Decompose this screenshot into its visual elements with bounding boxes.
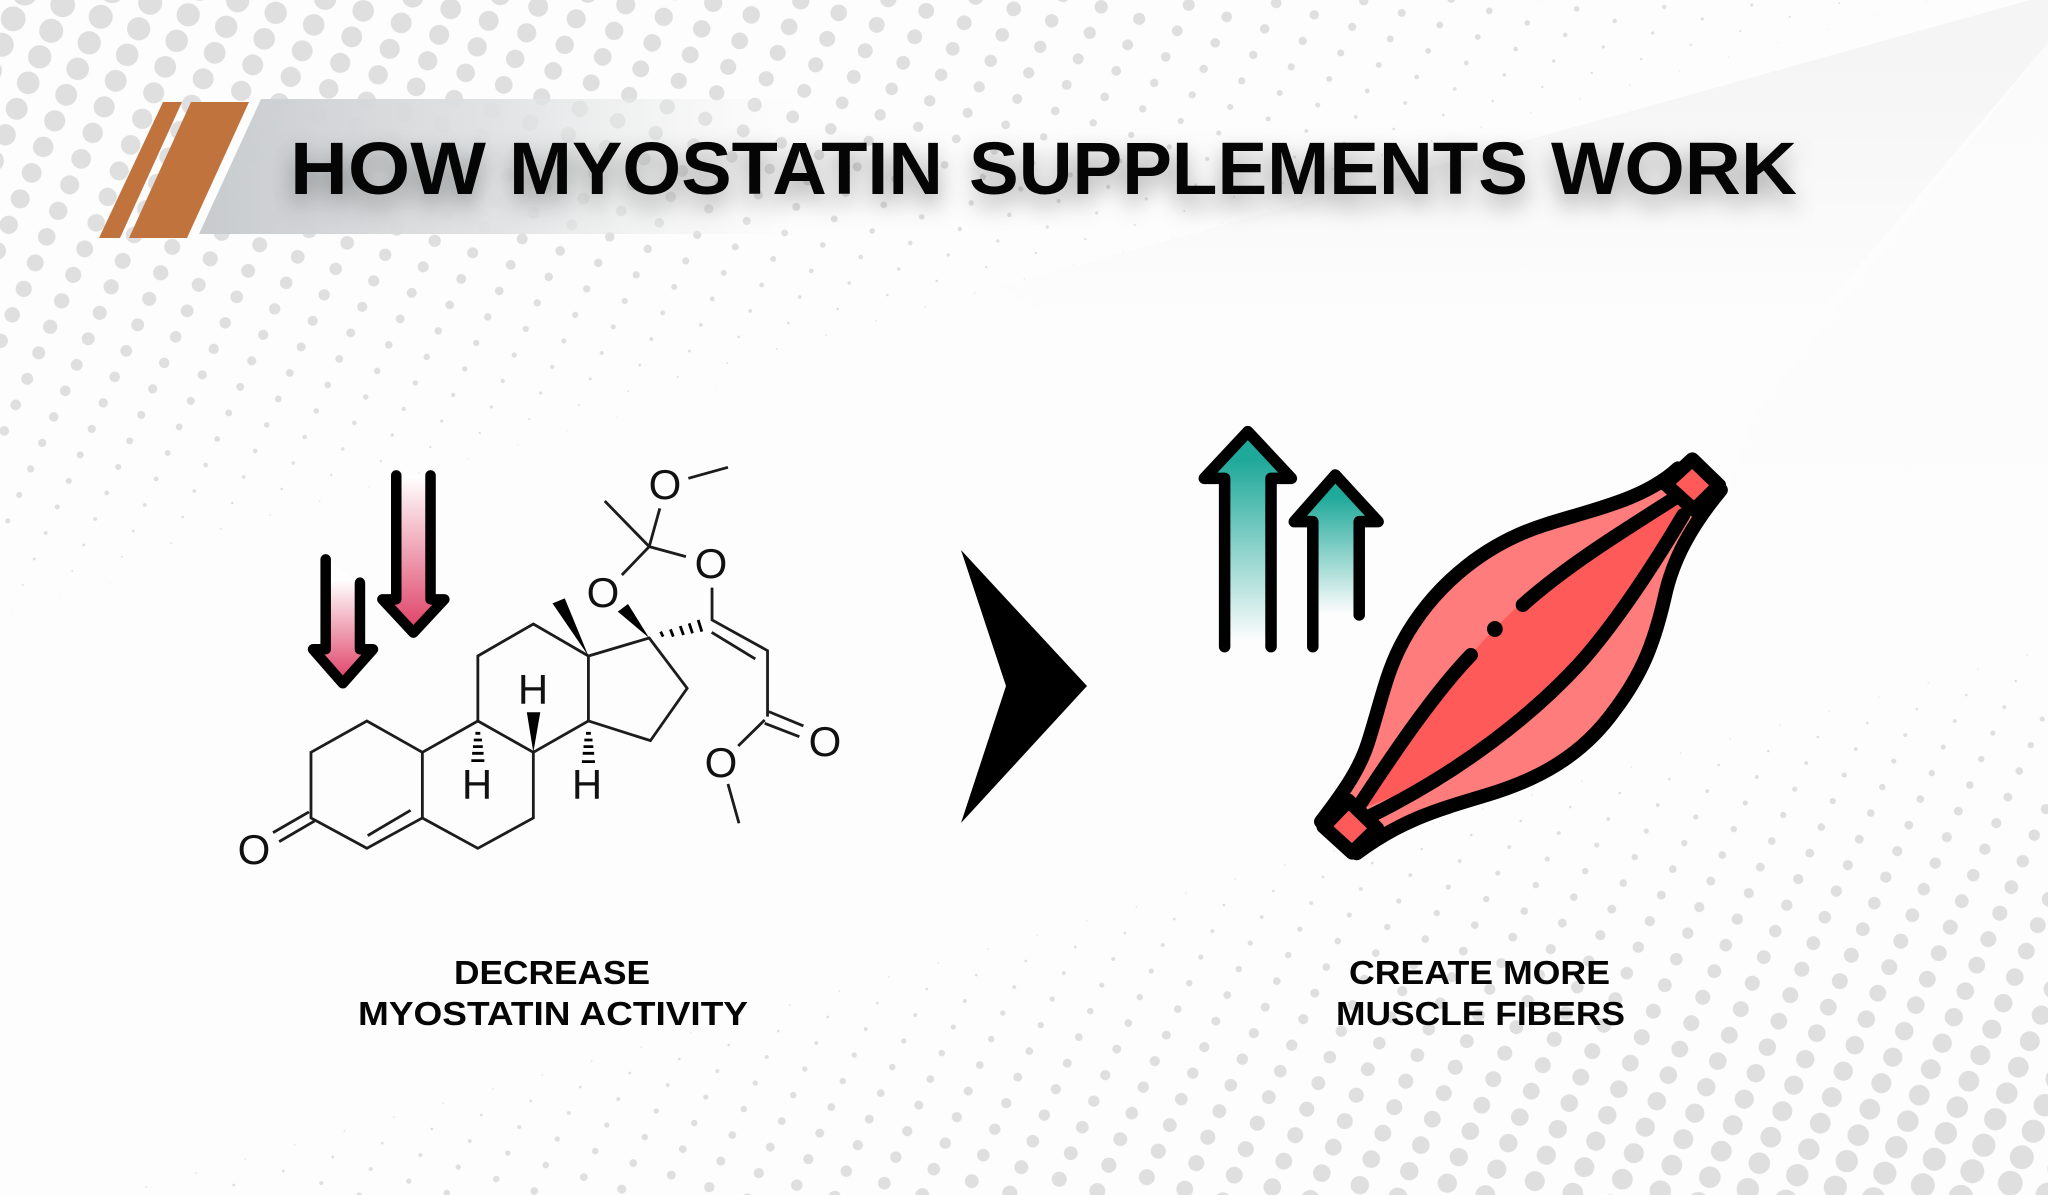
molecule diagram: steroid structure: H	[518, 666, 548, 713]
title: MYOSTATIN	[509, 127, 943, 210]
label: create more muscle fibers	[1336, 954, 1625, 1032]
icon: small up arrow	[1294, 475, 1378, 647]
label: decrease myostatin activity: MYOSTATIN ACTIVITY	[358, 995, 748, 1032]
icon: large down arrow	[382, 475, 444, 633]
label: decrease myostatin activity: DECREASE	[454, 954, 650, 991]
header banner	[99, 99, 1797, 238]
molecule diagram: steroid structure	[238, 461, 841, 873]
icon: muscle	[1321, 459, 1721, 853]
title: SUPPLEMENTS	[969, 127, 1528, 210]
molecule diagram: steroid structure: O	[587, 569, 619, 616]
molecule diagram: steroid structure: O	[705, 739, 737, 786]
icon: increase arrows	[1204, 432, 1378, 647]
banner grey band	[199, 99, 800, 234]
molecule diagram: steroid structure: H	[462, 761, 492, 808]
label: create more muscle fibers: MUSCLE FIBERS	[1336, 995, 1625, 1032]
molecule diagram: steroid structure: O	[238, 826, 270, 873]
icon: large up arrow	[1204, 432, 1291, 647]
title: WORK	[1551, 127, 1797, 210]
molecule diagram: steroid structure: H	[572, 761, 602, 808]
arrow: chevron	[961, 550, 1087, 823]
molecule diagram: steroid structure: O	[695, 540, 727, 587]
molecule diagram: steroid structure: O	[809, 718, 841, 765]
molecule diagram: steroid structure: O	[649, 461, 681, 508]
title	[290, 127, 1797, 210]
label: create more muscle fibers: CREATE MORE	[1349, 954, 1610, 991]
icon: decrease arrows	[313, 475, 444, 683]
label: decrease myostatin activity	[358, 954, 748, 1032]
icon: small down arrow	[313, 559, 373, 683]
orange bar narrow	[99, 102, 182, 238]
orange bar wide	[129, 102, 249, 238]
title: HOW	[290, 127, 486, 210]
